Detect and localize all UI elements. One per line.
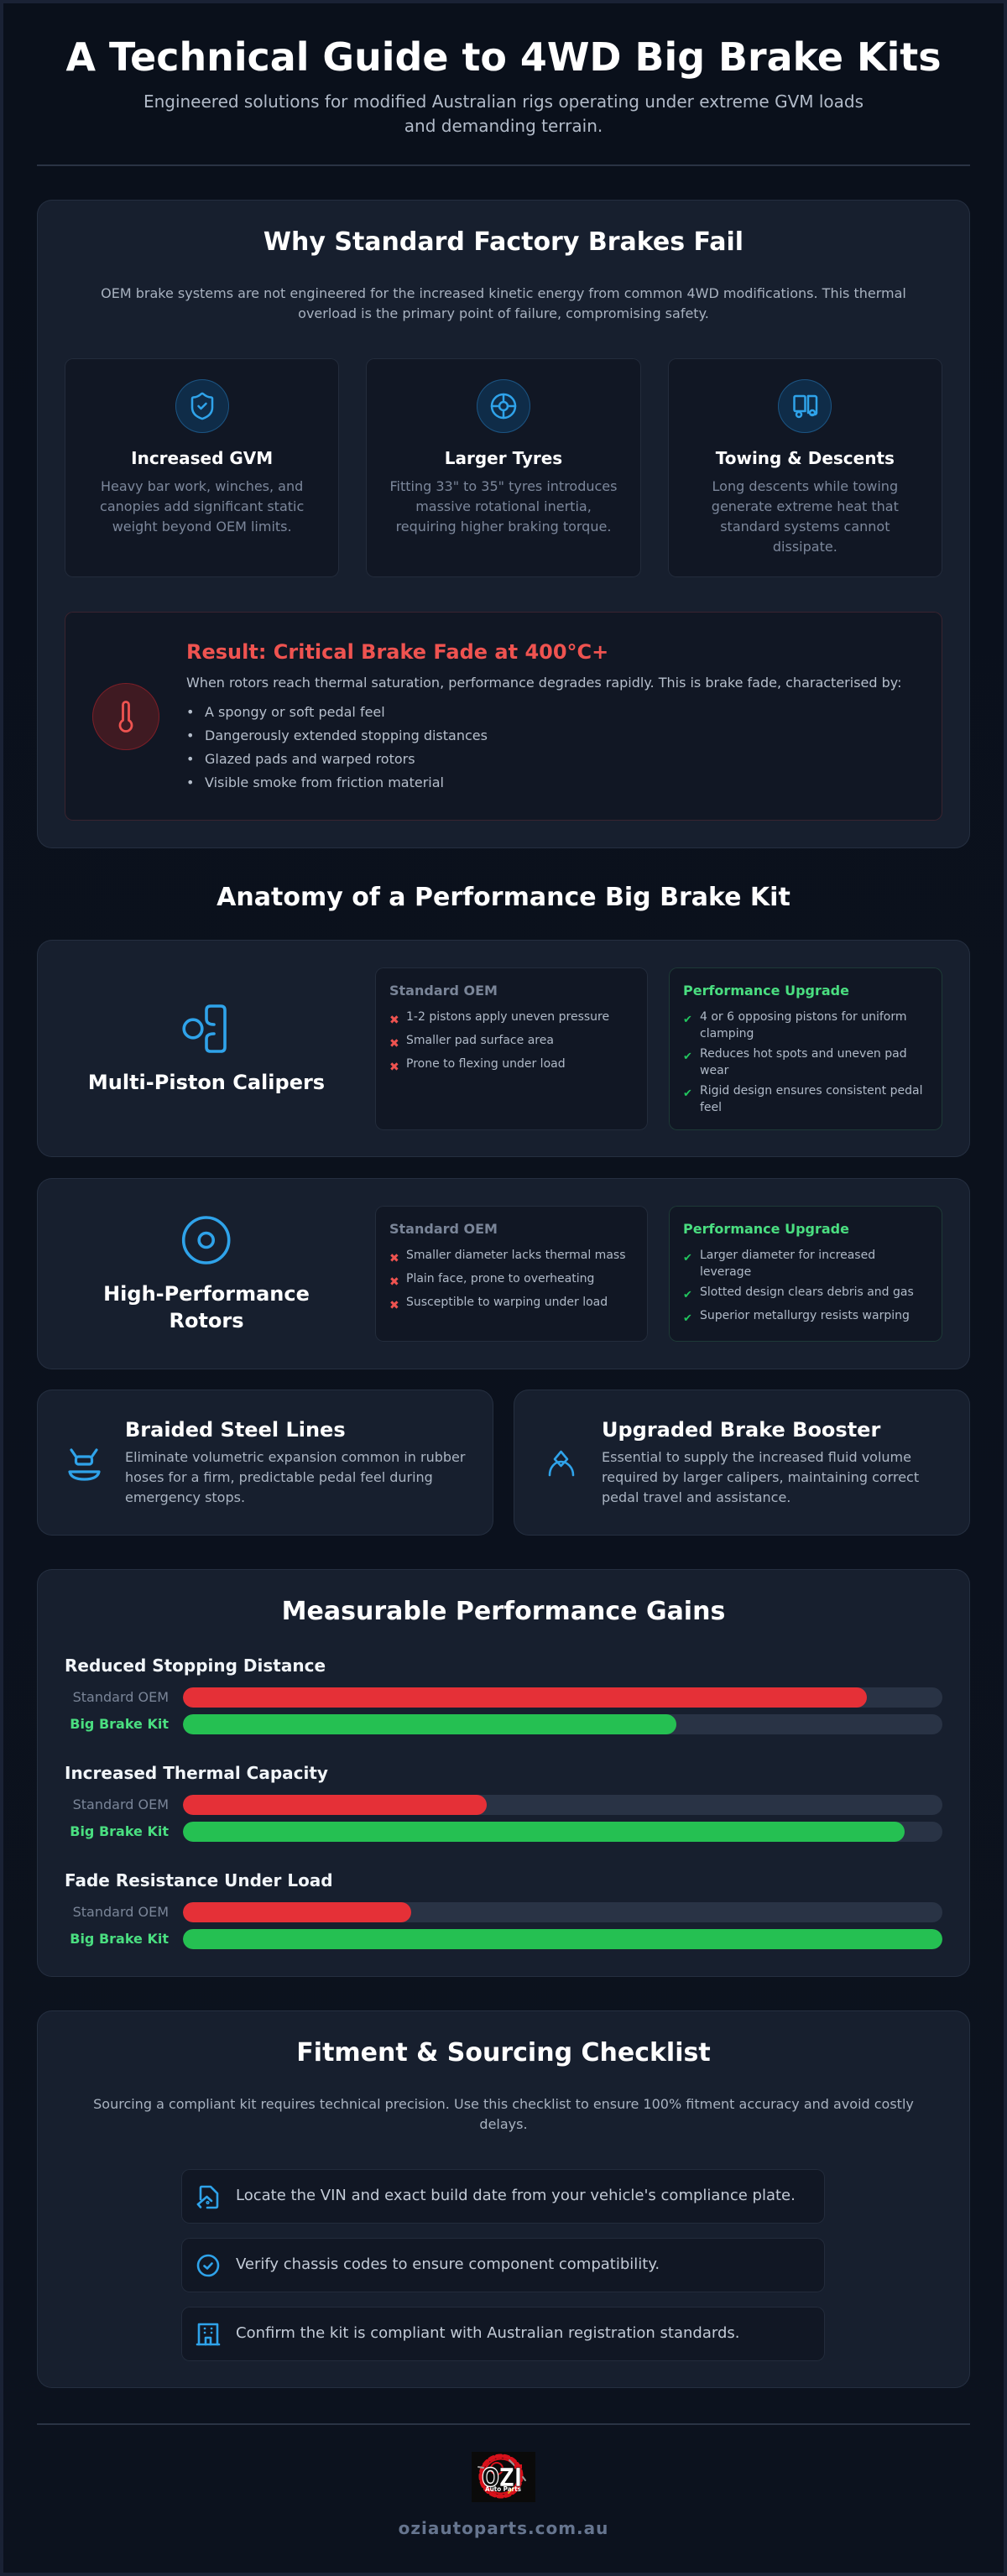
symptom list: • xyxy=(186,727,194,743)
OEM list: ✖ xyxy=(389,1252,399,1265)
OEM list: Smaller diameter lacks thermal mass xyxy=(406,1249,625,1262)
card: towing and descents xyxy=(668,358,942,577)
standard OEM box xyxy=(375,967,648,1130)
symptom list xyxy=(186,704,488,790)
icon: building xyxy=(196,2323,220,2346)
upgrade list: ✔ xyxy=(683,1252,692,1265)
card description: standard systems cannot xyxy=(720,519,890,534)
upgrade list: 4 or 6 opposing pistons for uniform xyxy=(700,1010,907,1024)
OEM list: ✖ xyxy=(389,1275,399,1289)
metric title: Fade Resistance Under Load xyxy=(65,1870,333,1890)
card text xyxy=(125,1449,465,1505)
upgrade list: Slotted design clears debris and gas xyxy=(700,1285,914,1299)
card title: Larger Tyres xyxy=(445,448,562,468)
panel: braided steel lines xyxy=(37,1390,493,1536)
card text: Eliminate volumetric expansion common in rubber xyxy=(125,1449,465,1465)
icon: caliper xyxy=(182,1004,227,1053)
performance upgrade box xyxy=(669,967,942,1130)
symptom list: • xyxy=(186,704,194,720)
upgrade list: feel xyxy=(700,1101,722,1114)
card: larger tyres xyxy=(366,358,641,577)
upgrade list: ✔ xyxy=(683,1051,692,1063)
icon: document house xyxy=(196,2185,218,2208)
card text xyxy=(602,1449,919,1505)
callout text: When rotors reach thermal saturation, performance degrades rapidly. This is brake fade, characterised by: xyxy=(186,675,901,691)
panel: measurable performance gains xyxy=(37,1569,970,1977)
chart: increased thermal capacity: Standard OEM xyxy=(73,1796,169,1812)
upgrade list: leverage xyxy=(700,1265,751,1279)
panel: multi-piston calipers xyxy=(37,940,970,1157)
intro text: overload is the primary point of failure, compromising safety. xyxy=(298,305,709,321)
panel: fitment and sourcing checklist xyxy=(37,2010,970,2388)
card title: Increased GVM xyxy=(131,448,273,468)
symptom list: • xyxy=(186,774,194,790)
OEM list: 1-2 pistons apply uneven pressure xyxy=(406,1010,609,1024)
panel title: High-Performance xyxy=(103,1282,310,1306)
chart: fade resistance under load: Big Brake Kit xyxy=(70,1931,169,1947)
OEM list: ✖ xyxy=(389,1299,399,1312)
heading: anatomy: Anatomy of a Performance Big Brake Kit xyxy=(217,883,790,912)
upgrade list: ✔ xyxy=(683,1312,692,1325)
standard OEM box xyxy=(375,1206,648,1342)
item text: Verify chassis codes to ensure component compatibility. xyxy=(236,2255,660,2273)
card title: Upgraded Brake Booster xyxy=(602,1418,880,1442)
intro text xyxy=(93,2096,914,2132)
logo: ozi auto parts xyxy=(472,2452,535,2502)
box heading: Performance Upgrade xyxy=(683,983,849,999)
icon: shield xyxy=(175,379,229,433)
icon: towing xyxy=(778,379,832,433)
chart: reduced stopping distance: Big Brake Kit xyxy=(70,1716,169,1732)
heading: Measurable Performance Gains xyxy=(282,1597,725,1626)
intro text: delays. xyxy=(479,2116,528,2132)
callout heading: Result: Critical Brake Fade at 400°C+ xyxy=(186,640,608,664)
upgrade list: ✔ xyxy=(683,1289,692,1301)
checklist item: VIN xyxy=(181,2169,825,2224)
card text: pedal travel and assistance. xyxy=(602,1489,790,1505)
upgrade list: wear xyxy=(700,1064,728,1077)
intro text: OEM brake systems are not engineered for the increased kinetic energy from common 4WD modifications. This thermal xyxy=(101,285,906,301)
symptom list: Visible smoke from friction material xyxy=(205,774,444,790)
OEM list: ✖ xyxy=(389,1037,399,1051)
upgrade list: Larger diameter for increased xyxy=(700,1249,875,1262)
upgrade list: ✔ xyxy=(683,1014,692,1026)
card description: canopies add significant static xyxy=(100,498,304,514)
card description xyxy=(389,478,617,534)
chart: fade resistance under load xyxy=(65,1870,942,1949)
upgrade list: Rigid design ensures consistent pedal xyxy=(700,1084,922,1098)
card text: Essential to supply the increased fluid volume xyxy=(602,1449,911,1465)
intro text xyxy=(101,285,906,321)
metric title: Increased Thermal Capacity xyxy=(65,1763,328,1783)
subtitle: and demanding terrain. xyxy=(404,116,603,136)
heading: Fitment & Sourcing Checklist xyxy=(296,2038,711,2068)
symptom list: A spongy or soft pedal feel xyxy=(205,704,385,720)
icon: wheel xyxy=(477,379,530,433)
card description: requiring higher braking torque. xyxy=(396,519,611,534)
title: A Technical Guide to 4WD Big Brake Kits xyxy=(65,34,942,80)
upgrade list: Superior metallurgy resists warping xyxy=(700,1309,910,1322)
symptom list: Glazed pads and warped rotors xyxy=(205,751,415,767)
performance upgrade box xyxy=(669,1206,942,1342)
card description: Long descents while towing xyxy=(712,478,898,494)
logo: ozi auto parts: Auto Parts xyxy=(485,2485,522,2493)
chart: increased thermal capacity: Big Brake Kit xyxy=(70,1823,169,1839)
logo: ozi auto parts: OZI xyxy=(482,2464,522,2493)
checklist item: chassis codes xyxy=(181,2238,825,2292)
icon: booster xyxy=(549,1450,574,1477)
chart: fade resistance under load: Standard OEM xyxy=(73,1904,169,1920)
card description: dissipate. xyxy=(773,539,837,555)
chart: reduced stopping distance: Standard OEM xyxy=(73,1689,169,1705)
panel: upgraded brake booster xyxy=(514,1390,970,1536)
OEM list: ✖ xyxy=(389,1061,399,1074)
card description xyxy=(100,478,304,534)
item text: Locate the VIN and exact build date from your vehicle's compliance plate. xyxy=(236,2187,796,2204)
item text: Confirm the kit is compliant with Australian registration standards. xyxy=(236,2324,740,2342)
panel title xyxy=(103,1282,310,1332)
chart: reduced stopping distance xyxy=(65,1656,942,1734)
upgrade list: clamping xyxy=(700,1027,754,1040)
card title: Braided Steel Lines xyxy=(125,1418,346,1442)
card description: Heavy bar work, winches, and xyxy=(101,478,303,494)
OEM list xyxy=(389,1010,609,1074)
card description: generate extreme heat that xyxy=(712,498,899,514)
OEM list: Prone to flexing under load xyxy=(406,1057,566,1071)
upgrade list: ✔ xyxy=(683,1087,692,1100)
box heading: Performance Upgrade xyxy=(683,1221,849,1237)
card title: Towing & Descents xyxy=(716,448,895,468)
symptom list: • xyxy=(186,751,194,767)
panel title: Multi-Piston Calipers xyxy=(88,1071,325,1094)
card description: massive rotational inertia, xyxy=(415,498,592,514)
checklist item: compliance xyxy=(181,2307,825,2361)
card description: weight beyond OEM limits. xyxy=(112,519,292,534)
subtitle xyxy=(143,91,864,136)
card description: Fitting 33" to 35" tyres introduces xyxy=(389,478,617,494)
card text: required by larger calipers, maintaining correct xyxy=(602,1469,919,1485)
OEM list: ✖ xyxy=(389,1014,399,1027)
box heading: Standard OEM xyxy=(389,983,498,999)
panel: high-performance rotors xyxy=(37,1178,970,1369)
card text: emergency stops. xyxy=(125,1489,245,1505)
panel: why standard factory brakes fail xyxy=(37,200,970,848)
footer website: oziautoparts.com.au xyxy=(399,2518,608,2538)
icon: braided line xyxy=(68,1448,101,1481)
upgrade list: Reduces hot spots and uneven pad xyxy=(700,1047,907,1061)
OEM list xyxy=(389,1249,625,1312)
icon: check circle xyxy=(196,2254,220,2277)
box heading: Standard OEM xyxy=(389,1221,498,1237)
symptom list: Dangerously extended stopping distances xyxy=(205,727,488,743)
upgrade list xyxy=(683,1249,914,1325)
upgrade list xyxy=(683,1010,922,1114)
metric title: Reduced Stopping Distance xyxy=(65,1656,326,1676)
card description xyxy=(712,478,899,555)
OEM list: Smaller pad surface area xyxy=(406,1034,554,1047)
icon: thermometer xyxy=(92,683,159,750)
subtitle: Engineered solutions for modified Australian rigs operating under extreme GVM loads xyxy=(143,91,864,112)
OEM list: Plain face, prone to overheating xyxy=(406,1272,594,1285)
card text: hoses for a firm, predictable pedal feel during xyxy=(125,1469,433,1485)
heading: Why Standard Factory Brakes Fail xyxy=(263,227,744,257)
OEM list: Susceptible to warping under load xyxy=(406,1296,608,1309)
intro text: Sourcing a compliant kit requires technical precision. Use this checklist to ensure 100% fitment accuracy and avoid costly xyxy=(93,2096,914,2112)
card: increased GVM xyxy=(65,358,339,577)
callout: critical brake fade xyxy=(65,612,942,821)
chart: increased thermal capacity xyxy=(65,1763,942,1842)
icon: rotor xyxy=(181,1216,230,1265)
panel title: Rotors xyxy=(169,1309,244,1332)
